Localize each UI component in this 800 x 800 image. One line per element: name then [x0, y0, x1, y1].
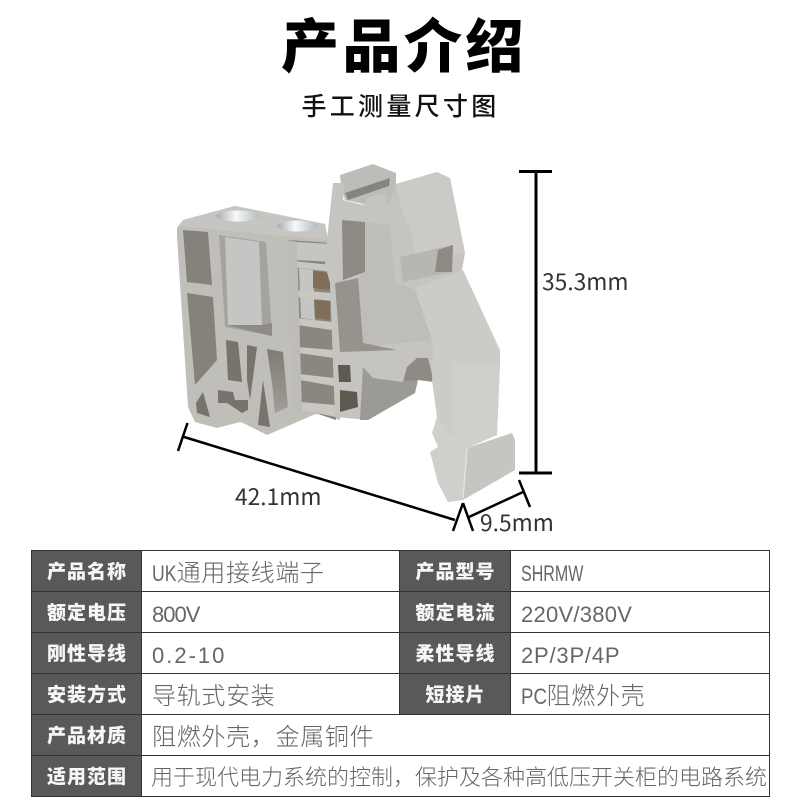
- row 2 value 2: 220V/380V: [521, 602, 632, 627]
- row 2 value 2: [511, 592, 769, 632]
- row 1 value: 通用接线端子: [177, 553, 325, 588]
- depth dimension 9.5mm: [463, 480, 530, 531]
- clip tower: [325, 164, 470, 420]
- row 4 value 2: PC: [521, 684, 547, 709]
- label: height: 35.3mm: [542, 264, 629, 297]
- row 4 label: 短接片: [400, 674, 510, 714]
- row 4 label: 安装方式: [32, 674, 141, 714]
- row 4 label: 安装方式: 安装方式: [47, 680, 127, 707]
- row 1 label: 产品名称: 产品名称: [47, 557, 127, 584]
- row 1 label: 产品型号: 产品型号: [415, 557, 496, 584]
- clip arm: [396, 172, 500, 448]
- row 3 label: 刚性导线: 刚性导线: [47, 639, 127, 666]
- row 2 label: 额定电流: 额定电流: [415, 598, 496, 625]
- row 3 label: 柔性导线: [400, 633, 510, 673]
- row 6 value: 用于现代电力系统的控制，保护及各种高低压开关柜的电路系统: [151, 760, 767, 792]
- row 3 label: 柔性导线: 柔性导线: [415, 639, 496, 666]
- row 1 label: 产品名称: [32, 551, 141, 591]
- row 2 label: 额定电压: [32, 592, 141, 632]
- row 1 label: 产品型号: [400, 551, 510, 591]
- row 5 value: 阻燃外壳，金属铜件: [152, 717, 374, 752]
- row 4 value: 导轨式安装: [152, 676, 276, 711]
- clip foot: [430, 417, 515, 502]
- row 2 value: [142, 592, 399, 632]
- row 2 value: 800V: [152, 602, 199, 627]
- row 4 value 2: [511, 674, 769, 714]
- row 3 value: [142, 633, 399, 673]
- ladder ribs: [287, 240, 336, 420]
- label: width: 42.1mm: [235, 479, 322, 512]
- left block body: [177, 206, 340, 435]
- row 3 label: 刚性导线: [32, 633, 141, 673]
- row 2 label: 额定电压: 额定电压: [47, 598, 127, 625]
- row 1 value: [142, 551, 399, 591]
- screws: [216, 210, 317, 232]
- row 2 label: 额定电流: [400, 592, 510, 632]
- row 5 label: 产品材质: [32, 715, 141, 755]
- specification table: [31, 550, 770, 797]
- row 1 value 2: SHRMW: [521, 561, 583, 586]
- row 5 label: 产品材质: 产品材质: [47, 721, 127, 748]
- row 6 label: 适用范围: [32, 756, 141, 796]
- row 4 label: 短接片: 短接片: [425, 680, 486, 707]
- height dimension 35.3mm: [519, 172, 552, 473]
- row 3 value 2: [511, 633, 769, 673]
- width dimension 42.1mm: [178, 423, 463, 531]
- subtitle: 手工测量尺寸图: [301, 87, 500, 123]
- row 5 value: [142, 715, 769, 755]
- row 1 value: UK: [152, 561, 176, 586]
- label: depth: 9.5mm: [480, 505, 554, 538]
- product photo: terminal end bracket: [177, 164, 515, 502]
- row 3 value 2: 2P/3P/4P: [521, 643, 620, 668]
- row 4 value 2: 阻燃外壳: [547, 676, 645, 711]
- row 4 value: [142, 674, 399, 714]
- title: 产品介绍: [281, 0, 527, 84]
- row 6 label: 适用范围: 适用范围: [47, 762, 127, 789]
- row 1 value 2: [511, 551, 769, 591]
- row 3 value: 0.2-10: [152, 643, 226, 668]
